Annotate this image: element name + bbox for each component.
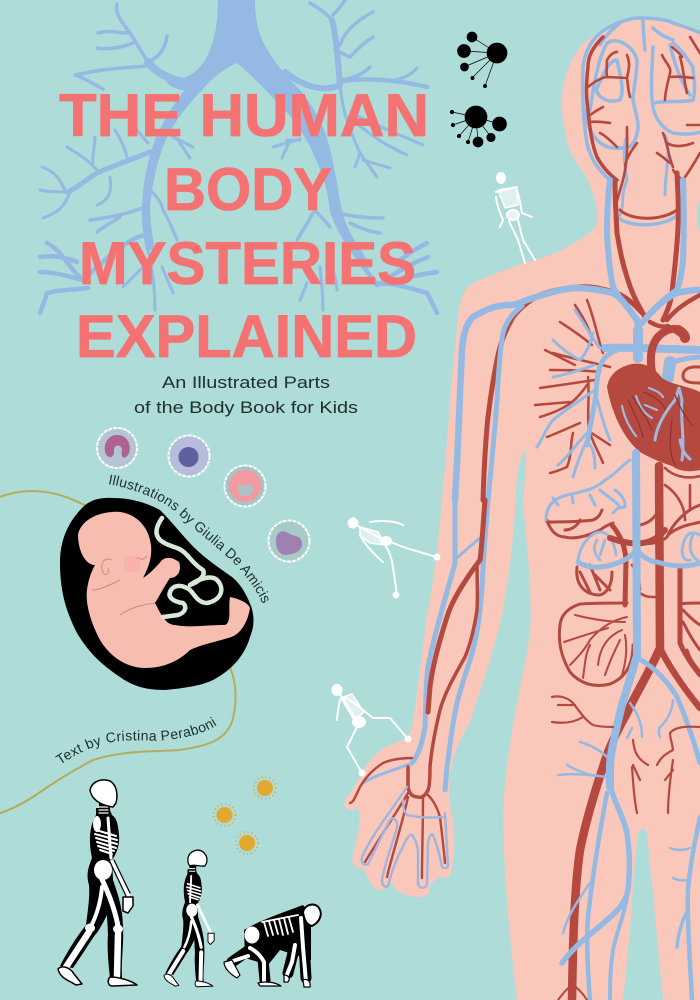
subtitle: An Illustrated Parts [162,373,330,392]
body outline [344,18,700,1000]
baby [78,512,250,668]
white skeleton: leaping [348,518,440,598]
credit: author: Text by Cristina Peraboni [55,716,216,763]
neck and chest vessels [455,173,700,500]
subtitle: of the Body Book for Kids [134,398,358,417]
black skeleton: hominid [164,850,214,987]
title: THE HUMAN [59,82,429,149]
lung vessels [535,300,617,477]
credit: illustrator: Illustrations by Giulia De Amicis [109,474,268,603]
cluster of black dots: lower [450,106,506,147]
icon: white blood cell 1 [97,428,137,468]
icon: white blood cell 2 [168,436,210,476]
white skeleton: crouching [332,685,410,776]
white skeleton: standing [496,173,535,263]
icon: bronchial tree lungs [40,0,437,313]
arm and hand vessels [350,500,488,888]
black skeleton: ape [224,905,321,987]
abdominal vessels and organs [546,453,700,1000]
icon: heart [607,364,700,471]
baby ear, eye and cheek [92,556,155,615]
title: BODY [164,156,332,223]
icon: virus particles [214,777,276,854]
subtitle [134,373,358,417]
brain vessels [583,18,700,215]
cluster of black dots: top [458,32,507,88]
black skeleton: upright human [58,780,137,986]
umbilical cord [156,518,221,617]
gold curve upper [0,491,88,507]
title: EXPLAINED [76,303,417,370]
icon: fetus in womb [60,498,254,690]
title: MYSTERIES [79,230,416,297]
gold curve lower [0,665,236,813]
title [59,82,429,370]
icon: white blood cell 4 [268,520,310,562]
icon: white blood cell 3 [224,466,266,506]
human body silhouette with circulatory system [344,18,700,1000]
